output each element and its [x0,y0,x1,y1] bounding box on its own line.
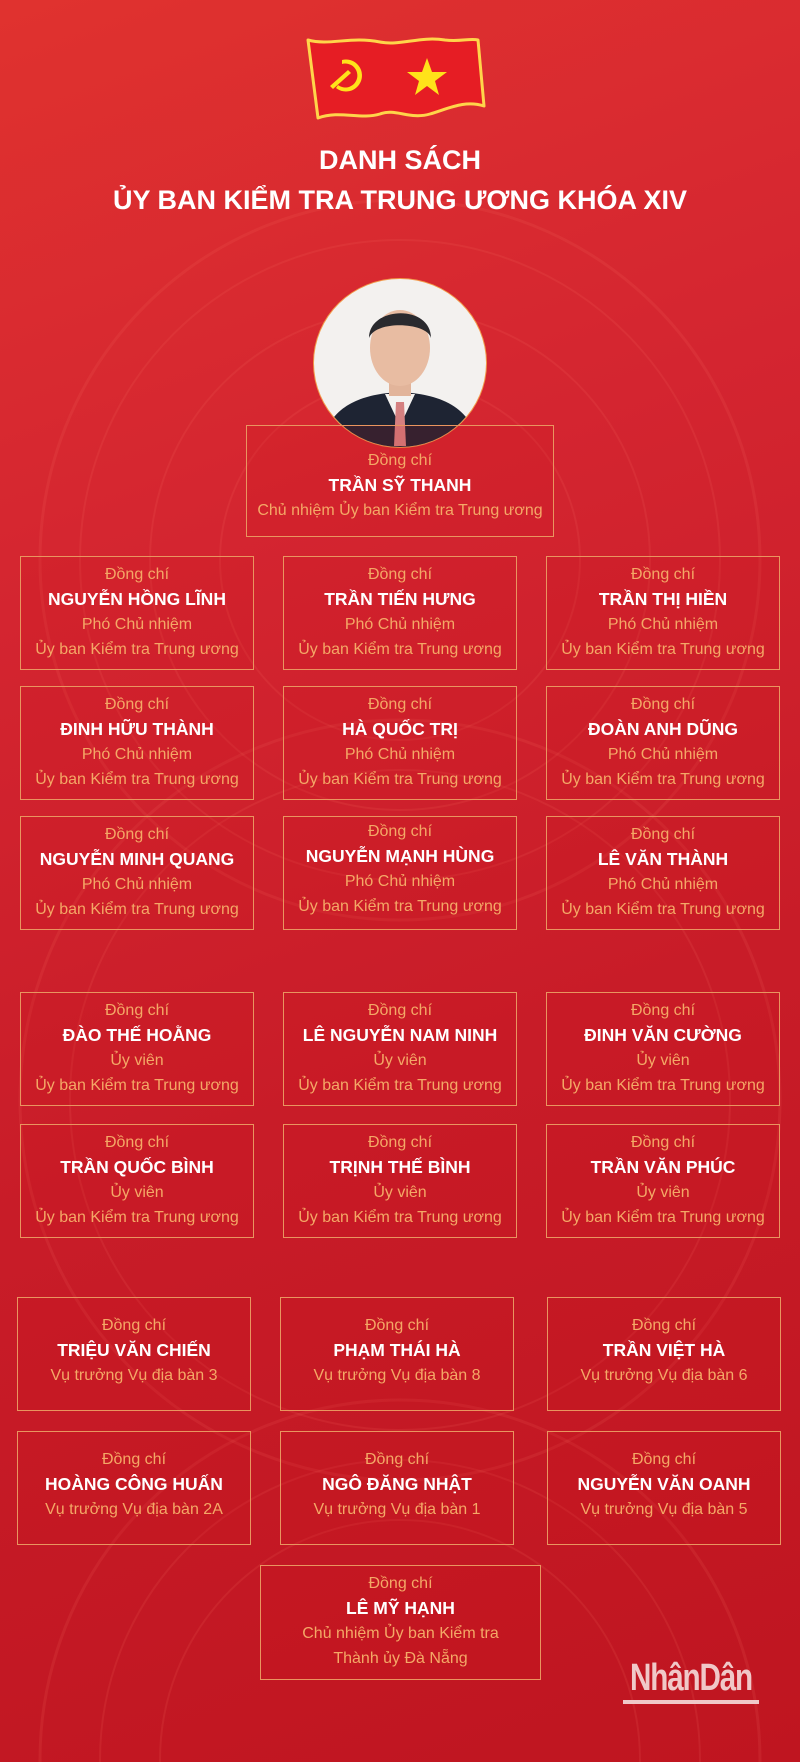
panel: Nguyen Manh Hung: NGUYỄN MẠNH HÙNG [306,846,494,866]
panel: Le Van Thanh: Đồng chí [631,826,695,843]
panel: Le My Hanh [260,1565,541,1680]
panel: Le My Hanh: Thành ủy Đà Nẵng [333,1650,468,1667]
panel: Ha Quoc Tri: Ủy ban Kiểm tra Trung ương [298,771,502,788]
panel: Le Nguyen Nam Ninh: Đồng chí [368,1002,432,1019]
panel: Ha Quoc Tri [283,686,517,800]
panel: Tran Quoc Binh: Ủy viên [110,1184,164,1201]
panel: Nguyen Hong Linh: Phó Chủ nhiệm [82,616,192,633]
panel: Hoang Cong Huan [17,1431,251,1545]
panel: Tran Van Phuc: Đồng chí [631,1134,695,1151]
panel: Trieu Van Chien: Vụ trưởng Vụ địa bàn 3 [50,1367,218,1384]
panel: Ha Quoc Tri: Phó Chủ nhiệm [345,746,455,763]
panel: Tran Thi Hien: TRẦN THỊ HIỀN [599,589,727,609]
panel: Tran Thi Hien: Đồng chí [631,566,695,583]
panel: Ha Quoc Tri: Đồng chí [368,696,432,713]
panel: Dao The Hoang: Đồng chí [105,1002,169,1019]
panel: Dinh Van Cuong [546,992,780,1106]
panel: Tran Tien Hung: Đồng chí [368,566,432,583]
panel: Le Nguyen Nam Ninh: Ủy viên [373,1052,427,1069]
panel: Trinh The Binh: Ủy viên [373,1184,427,1201]
panel: Tran Thi Hien: Phó Chủ nhiệm [608,616,718,633]
panel: Nguyen Hong Linh [20,556,254,670]
panel: Tran Quoc Binh [20,1124,254,1238]
panel: Le Nguyen Nam Ninh [283,992,517,1106]
panel: Ngo Dang Nhat: Đồng chí [365,1451,429,1468]
panel: Nguyen Manh Hung: Đồng chí [368,823,432,840]
panel: Tran Thi Hien: Ủy ban Kiểm tra Trung ương [561,641,765,658]
panel: Tran Van Phuc: TRẦN VĂN PHÚC [591,1157,735,1177]
logo: Nhan Dan: NhânDân [630,1657,752,1699]
panel: Trinh The Binh: Đồng chí [368,1134,432,1151]
panel: Trinh The Binh [283,1124,517,1238]
panel: Dinh Van Cuong: Ủy ban Kiểm tra Trung ương [561,1077,765,1094]
panel: Nguyen Van Oanh [547,1431,781,1545]
panel: chairman: Đồng chí [368,452,432,469]
panel: chairman: TRẦN SỸ THANH [329,475,471,495]
panel: Nguyen Van Oanh: Vụ trưởng Vụ địa bàn 5 [580,1501,748,1518]
panel: Ngo Dang Nhat: Vụ trưởng Vụ địa bàn 1 [313,1501,481,1518]
panel: Nguyen Minh Quang: Đồng chí [105,826,169,843]
panel: Le Van Thanh: Ủy ban Kiểm tra Trung ương [561,901,765,918]
panel: Doan Anh Dung: ĐOÀN ANH DŨNG [588,719,738,739]
panel: Tran Viet Ha [547,1297,781,1411]
title: DANH SÁCH [319,145,481,175]
panel: Nguyen Manh Hung: Ủy ban Kiểm tra Trung ương [298,898,502,915]
panel: Nguyen Hong Linh: NGUYỄN HỒNG LĨNH [48,589,226,609]
panel: Le Van Thanh: Phó Chủ nhiệm [608,876,718,893]
panel: Le My Hanh: LÊ MỸ HẠNH [346,1598,455,1618]
photo: chairman portrait [313,278,487,448]
panel: Tran Van Phuc: Ủy ban Kiểm tra Trung ương [561,1209,765,1226]
panel: Dinh Huu Thanh: Ủy ban Kiểm tra Trung ương [35,771,239,788]
panel: Doan Anh Dung: Phó Chủ nhiệm [608,746,718,763]
panel: Ngo Dang Nhat: NGÔ ĐĂNG NHẬT [322,1474,472,1494]
panel: Dao The Hoang: ĐÀO THẾ HOẰNG [63,1025,211,1045]
panel: Hoang Cong Huan: Vụ trưởng Vụ địa bàn 2A [45,1501,223,1518]
panel: Nguyen Van Oanh: NGUYỄN VĂN OANH [577,1474,751,1494]
panel: Tran Tien Hung: Phó Chủ nhiệm [345,616,455,633]
panel: Dinh Huu Thanh: ĐINH HỮU THÀNH [60,719,214,739]
panel: Tran Viet Ha: Đồng chí [632,1317,696,1334]
title [113,145,687,215]
panel: chairman: Chủ nhiệm Ủy ban Kiểm tra Trung ương [257,502,543,519]
title: ỦY BAN KIỂM TRA TRUNG ƯƠNG KHÓA XIV [113,185,687,215]
icon: party and national flag [306,38,486,120]
panel: Tran Van Phuc [546,1124,780,1238]
panel: Trinh The Binh: Ủy ban Kiểm tra Trung ương [298,1209,502,1226]
panel: Trieu Van Chien [17,1297,251,1411]
panel: Le Van Thanh: LÊ VĂN THÀNH [598,849,728,869]
panel: Tran Thi Hien [546,556,780,670]
panel: Pham Thai Ha: Vụ trưởng Vụ địa bàn 8 [313,1367,481,1384]
panel: Pham Thai Ha [280,1297,514,1411]
panel: Dinh Huu Thanh: Đồng chí [105,696,169,713]
panel: Tran Quoc Binh: Ủy ban Kiểm tra Trung ương [35,1209,239,1226]
panel: Nguyen Hong Linh: Đồng chí [105,566,169,583]
panel: Tran Quoc Binh: Đồng chí [105,1134,169,1151]
panel: Dinh Van Cuong: Ủy viên [636,1052,690,1069]
panel: Nguyen Minh Quang: Ủy ban Kiểm tra Trung ương [35,901,239,918]
panel: Le Van Thanh [546,816,780,930]
panel: Nguyen Manh Hung: Phó Chủ nhiệm [345,873,455,890]
panel: Tran Tien Hung: TRẦN TIẾN HƯNG [324,589,476,609]
panel: Nguyen Minh Quang: Phó Chủ nhiệm [82,876,192,893]
panel: Pham Thai Ha: Đồng chí [365,1317,429,1334]
panel: Doan Anh Dung [546,686,780,800]
panel: Hoang Cong Huan: HOÀNG CÔNG HUẤN [45,1474,223,1494]
panel: Dinh Van Cuong: ĐINH VĂN CƯỜNG [584,1025,742,1045]
panel: Le My Hanh: Chủ nhiệm Ủy ban Kiểm tra [302,1625,499,1642]
panel: Tran Tien Hung: Ủy ban Kiểm tra Trung ương [298,641,502,658]
panel: Le Nguyen Nam Ninh: Ủy ban Kiểm tra Trung ương [298,1077,502,1094]
panel: Nguyen Manh Hung [283,816,517,930]
panel: Nguyen Minh Quang: NGUYỄN MINH QUANG [40,849,234,869]
panel: Nguyen Hong Linh: Ủy ban Kiểm tra Trung ương [35,641,239,658]
panel: Tran Viet Ha: Vụ trưởng Vụ địa bàn 6 [580,1367,748,1384]
panel: Ha Quoc Tri: HÀ QUỐC TRỊ [342,719,458,739]
panel: Dinh Van Cuong: Đồng chí [631,1002,695,1019]
panel: Nguyen Minh Quang [20,816,254,930]
panel: Tran Viet Ha: TRẦN VIỆT HÀ [603,1340,725,1360]
panel: Doan Anh Dung: Đồng chí [631,696,695,713]
panel: Doan Anh Dung: Ủy ban Kiểm tra Trung ương [561,771,765,788]
panel: Dao The Hoang [20,992,254,1106]
panel: Trieu Van Chien: Đồng chí [102,1317,166,1334]
panel: Le Nguyen Nam Ninh: LÊ NGUYỄN NAM NINH [303,1025,497,1045]
panel: Trieu Van Chien: TRIỆU VĂN CHIẾN [57,1340,211,1360]
panel: Dinh Huu Thanh [20,686,254,800]
panel: Tran Van Phuc: Ủy viên [636,1184,690,1201]
panel: Nguyen Van Oanh: Đồng chí [632,1451,696,1468]
panel: Trinh The Binh: TRỊNH THẾ BÌNH [330,1157,470,1177]
panel: Tran Tien Hung [283,556,517,670]
panel: Dinh Huu Thanh: Phó Chủ nhiệm [82,746,192,763]
panel: Dao The Hoang: Ủy ban Kiểm tra Trung ương [35,1077,239,1094]
panel: Le My Hanh: Đồng chí [368,1575,433,1592]
panel: chairman [246,425,554,537]
panel: Dao The Hoang: Ủy viên [110,1052,164,1069]
panel: Hoang Cong Huan: Đồng chí [102,1451,166,1468]
panel: Tran Quoc Binh: TRẦN QUỐC BÌNH [60,1157,214,1177]
panel: Pham Thai Ha: PHẠM THÁI HÀ [333,1340,461,1360]
panel: Ngo Dang Nhat [280,1431,514,1545]
